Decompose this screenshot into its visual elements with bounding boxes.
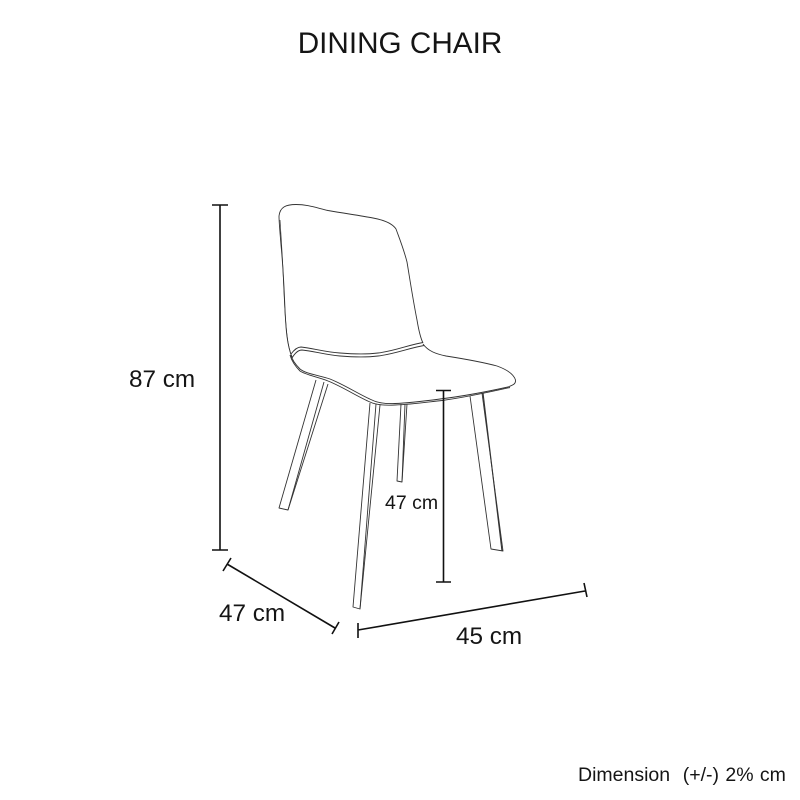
back leg	[397, 404, 407, 482]
label: depth 47 cm: 47 cm	[219, 600, 285, 627]
front left leg	[279, 380, 328, 510]
label: 87 cm: 87 cm	[129, 366, 195, 393]
chair back	[279, 204, 423, 357]
dimension: height 87 cm	[212, 205, 228, 550]
dimension: seat height 47 cm	[436, 390, 451, 582]
front centre leg	[353, 403, 380, 609]
label: seat height 47 cm: 47 cm	[385, 492, 438, 514]
tolerance note: Dimension (+/-) 2% cm	[578, 764, 786, 786]
seat seam	[291, 342, 424, 358]
chair back inner edge	[280, 220, 292, 358]
label: width 45 cm: 45 cm	[456, 623, 522, 650]
dimension: depth 47 cm	[223, 558, 339, 634]
chair line drawing	[279, 204, 516, 609]
seat	[290, 344, 516, 405]
right leg	[470, 393, 503, 551]
title: DINING CHAIR	[298, 27, 502, 60]
dimension: width 45 cm	[358, 583, 587, 638]
